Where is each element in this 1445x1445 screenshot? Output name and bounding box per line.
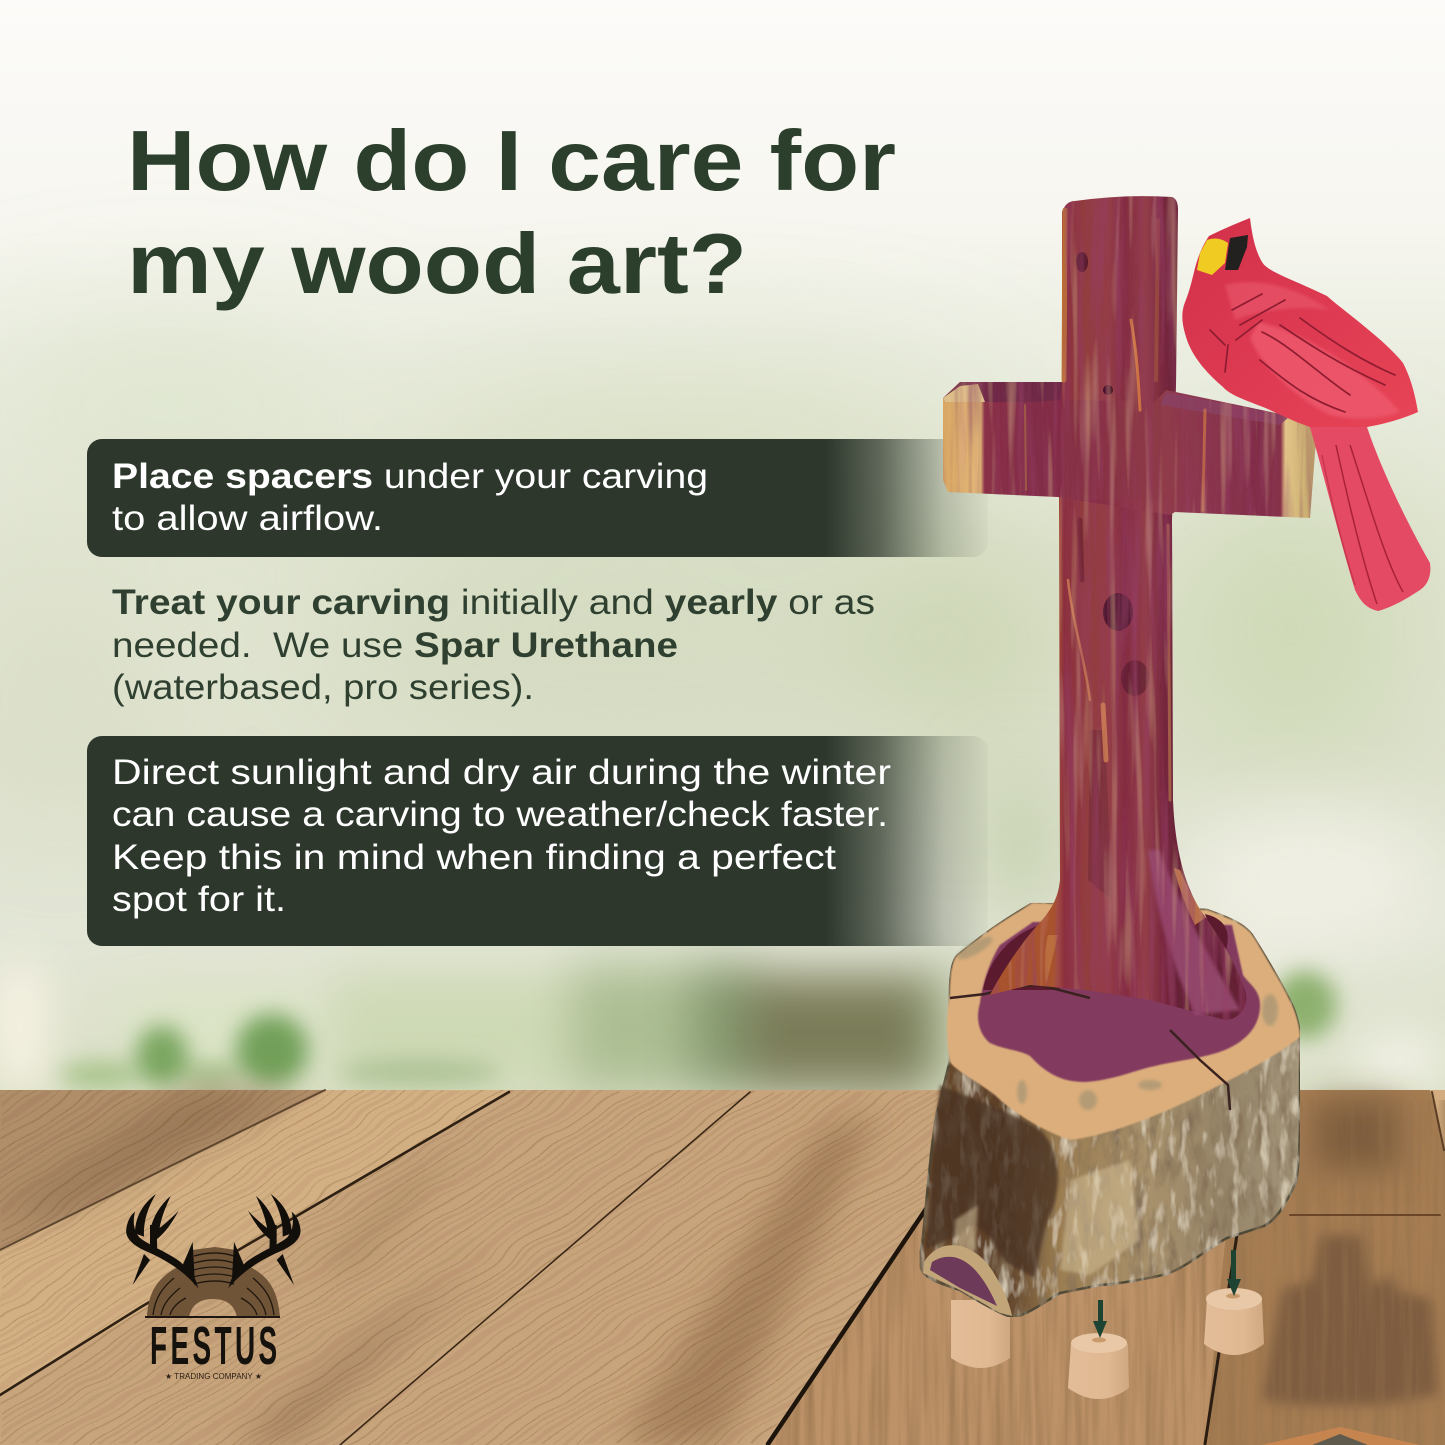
cork spacer: left	[951, 1300, 1010, 1368]
crack in stump	[950, 985, 1230, 1110]
product: cedar cross with cardinal on stump	[920, 196, 1430, 1399]
title: my wood art?	[127, 217, 747, 312]
cross	[943, 196, 1316, 1020]
title: How do I care for	[127, 114, 896, 209]
tail feather lines	[1322, 445, 1403, 604]
dark hollows	[983, 914, 1228, 990]
logo tagline: ★ TRADING COMPANY ★	[165, 1372, 262, 1381]
floor grain	[0, 1090, 1000, 1445]
panel: sunlight and dry air: can cause a carving to weather/check faster.	[112, 795, 888, 834]
blurred garden background	[0, 0, 1445, 1095]
text block: treat your carving: Treat your carving initially and yearly or as	[112, 583, 875, 622]
title	[127, 114, 896, 312]
panel: sunlight and dry air: Keep this in mind when finding a perfect	[112, 838, 836, 877]
wing highlight	[1250, 322, 1400, 418]
panel: place spacers	[87, 439, 988, 557]
wooden table top	[0, 1090, 1445, 1445]
panel: place spacers: to allow airflow.	[112, 499, 383, 538]
stump bark	[920, 903, 1300, 1317]
plank seams	[0, 1090, 1444, 1445]
feather lines	[1210, 294, 1395, 412]
floor inlay	[1262, 1427, 1420, 1445]
trunk front over arm	[1062, 400, 1162, 500]
logo antlers	[126, 1194, 301, 1288]
beak	[1197, 239, 1228, 275]
cross trunk	[990, 196, 1246, 1020]
cross arm	[943, 382, 1316, 518]
wood tone bands	[0, 1090, 1400, 1445]
body	[1182, 218, 1418, 427]
arrow: right spacer	[1227, 1250, 1241, 1296]
logo: Festus Trading Company	[126, 1194, 301, 1381]
dark grain figure on right plank	[1262, 1235, 1438, 1405]
cut limb end	[923, 1245, 1012, 1316]
flare shading	[1148, 850, 1240, 1015]
purple heartwood	[978, 922, 1260, 1082]
logo stump	[145, 1247, 280, 1318]
knots and grain	[1076, 252, 1149, 900]
grey rim streaks	[955, 933, 1278, 1110]
text block: treat your carving: (waterbased, pro series).	[112, 668, 534, 707]
cork spacer: right	[1204, 1288, 1264, 1355]
stump cut face	[947, 903, 1300, 1140]
arrow: middle spacer	[1093, 1300, 1107, 1338]
dark bark patch	[925, 1085, 1058, 1278]
tail	[1310, 427, 1430, 611]
text block: treat your carving	[112, 583, 875, 707]
cork spacer: middle	[1068, 1333, 1129, 1399]
panel: place spacers: Place spacers under your carving	[112, 457, 708, 496]
text block: treat your carving: needed. We use Spar Urethane	[112, 626, 678, 665]
logo wordmark: FESTUS	[150, 1316, 281, 1377]
pale bark patches	[955, 1160, 1140, 1275]
arm top surface	[943, 382, 1062, 402]
panel: sunlight and dry air	[87, 736, 988, 946]
cardinal	[1182, 218, 1430, 611]
panel: sunlight and dry air: spot for it.	[112, 880, 286, 919]
panel: sunlight and dry air: Direct sunlight and dry air during the winter	[112, 753, 891, 792]
eye mask	[1225, 235, 1248, 270]
